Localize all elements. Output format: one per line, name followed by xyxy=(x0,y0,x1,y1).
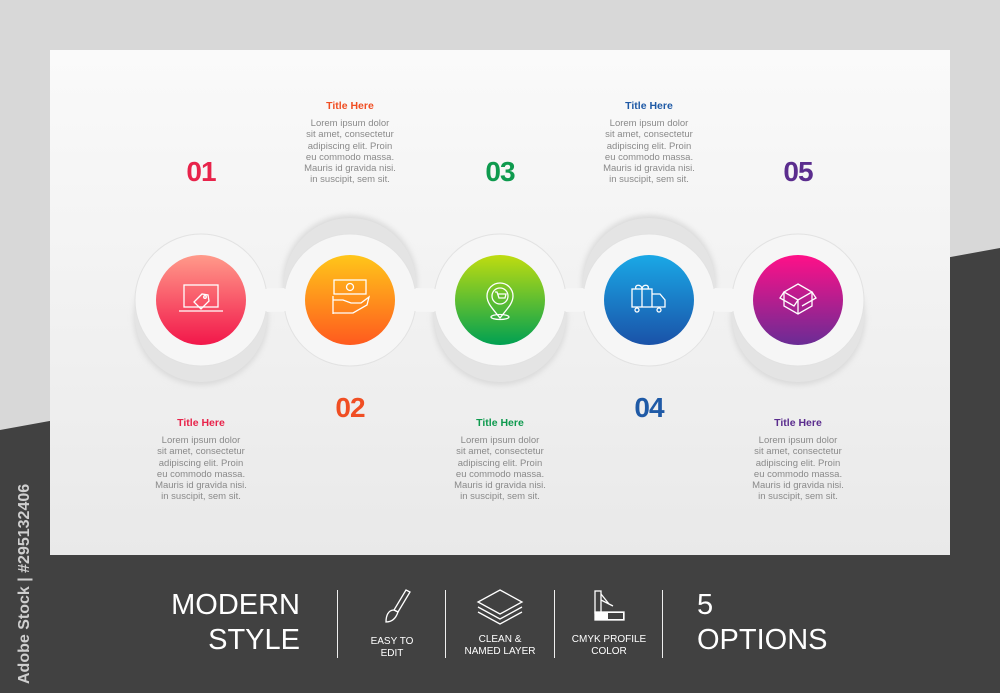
feature: easy to edit xyxy=(371,589,413,659)
text: 03 xyxy=(485,156,515,187)
text block 5: in suscipit, sem sit. xyxy=(758,491,838,502)
text block 1: Title Here xyxy=(177,417,225,429)
footer title: MODERN xyxy=(171,589,300,621)
text block 4: eu commodo massa. xyxy=(605,152,693,163)
text block 3 xyxy=(454,417,546,502)
numbers: 01 xyxy=(186,156,216,187)
text block 1: Lorem ipsum dolor xyxy=(162,435,240,446)
step 2 icon xyxy=(305,255,395,345)
footer title xyxy=(171,589,300,656)
step 5 icon xyxy=(753,255,843,345)
text block 5: Title Here xyxy=(774,417,822,429)
text block 2: Title Here xyxy=(326,100,374,112)
text block 3: Title Here xyxy=(476,417,524,429)
text block 2: Lorem ipsum dolor xyxy=(311,118,389,129)
feature: easy to edit: EASY TO xyxy=(371,636,413,647)
connector band xyxy=(201,288,798,312)
text: 02 xyxy=(335,392,365,423)
text block 4: Mauris id gravida nisi. xyxy=(603,163,695,174)
footer title: STYLE xyxy=(208,624,300,656)
text block 2: eu commodo massa. xyxy=(306,152,394,163)
feature: cmyk: CMYK PROFILE xyxy=(572,634,646,645)
text block 4 xyxy=(603,100,695,185)
text block 2: in suscipit, sem sit. xyxy=(310,174,390,185)
text block 3: Lorem ipsum dolor xyxy=(461,435,539,446)
text block 3: adipiscing elit. Proin xyxy=(458,458,542,469)
text block 4: Title Here xyxy=(625,100,673,112)
text block 1: Mauris id gravida nisi. xyxy=(155,480,247,491)
text block 3: in suscipit, sem sit. xyxy=(460,491,540,502)
text block 2: Mauris id gravida nisi. xyxy=(304,163,396,174)
feature: layers: CLEAN & xyxy=(479,634,521,645)
feature: layers: NAMED LAYER xyxy=(465,646,535,657)
text block 1: in suscipit, sem sit. xyxy=(161,491,241,502)
step 3 icon xyxy=(455,255,545,345)
ring shadows xyxy=(134,215,865,385)
text block 3: sit amet, consectetur xyxy=(456,446,544,457)
text block 2: adipiscing elit. Proin xyxy=(308,141,392,152)
text block 3: eu commodo massa. xyxy=(456,469,544,480)
text block 1: sit amet, consectetur xyxy=(157,446,245,457)
footer options xyxy=(697,589,828,656)
footer options: 5 xyxy=(697,589,713,621)
text block 2: sit amet, consectetur xyxy=(306,129,394,140)
text block 2 xyxy=(304,100,396,185)
feature: easy to edit: EDIT xyxy=(381,648,403,659)
feature: layers xyxy=(465,589,535,657)
text block 1 xyxy=(155,417,247,502)
text block 5: sit amet, consectetur xyxy=(754,446,842,457)
feature: cmyk xyxy=(572,590,646,657)
step 1 icon xyxy=(156,255,246,345)
step 4 icon xyxy=(604,255,694,345)
text block 4: adipiscing elit. Proin xyxy=(607,141,691,152)
text block 5: adipiscing elit. Proin xyxy=(756,458,840,469)
text block 1: adipiscing elit. Proin xyxy=(159,458,243,469)
text block 4: in suscipit, sem sit. xyxy=(609,174,689,185)
footer options: OPTIONS xyxy=(697,624,828,656)
text block 3: Mauris id gravida nisi. xyxy=(454,480,546,491)
text block 5: eu commodo massa. xyxy=(754,469,842,480)
text block 5: Mauris id gravida nisi. xyxy=(752,480,844,491)
text block 4: Lorem ipsum dolor xyxy=(610,118,688,129)
text block 5: Lorem ipsum dolor xyxy=(759,435,837,446)
text block 1: eu commodo massa. xyxy=(157,469,245,480)
text: 04 xyxy=(634,392,664,423)
text: 05 xyxy=(783,156,813,187)
text block 5 xyxy=(752,417,844,502)
feature: cmyk: COLOR xyxy=(591,646,627,657)
text block 4: sit amet, consectetur xyxy=(605,129,693,140)
watermark id: Adobe Stock | #295132406 xyxy=(16,484,33,684)
